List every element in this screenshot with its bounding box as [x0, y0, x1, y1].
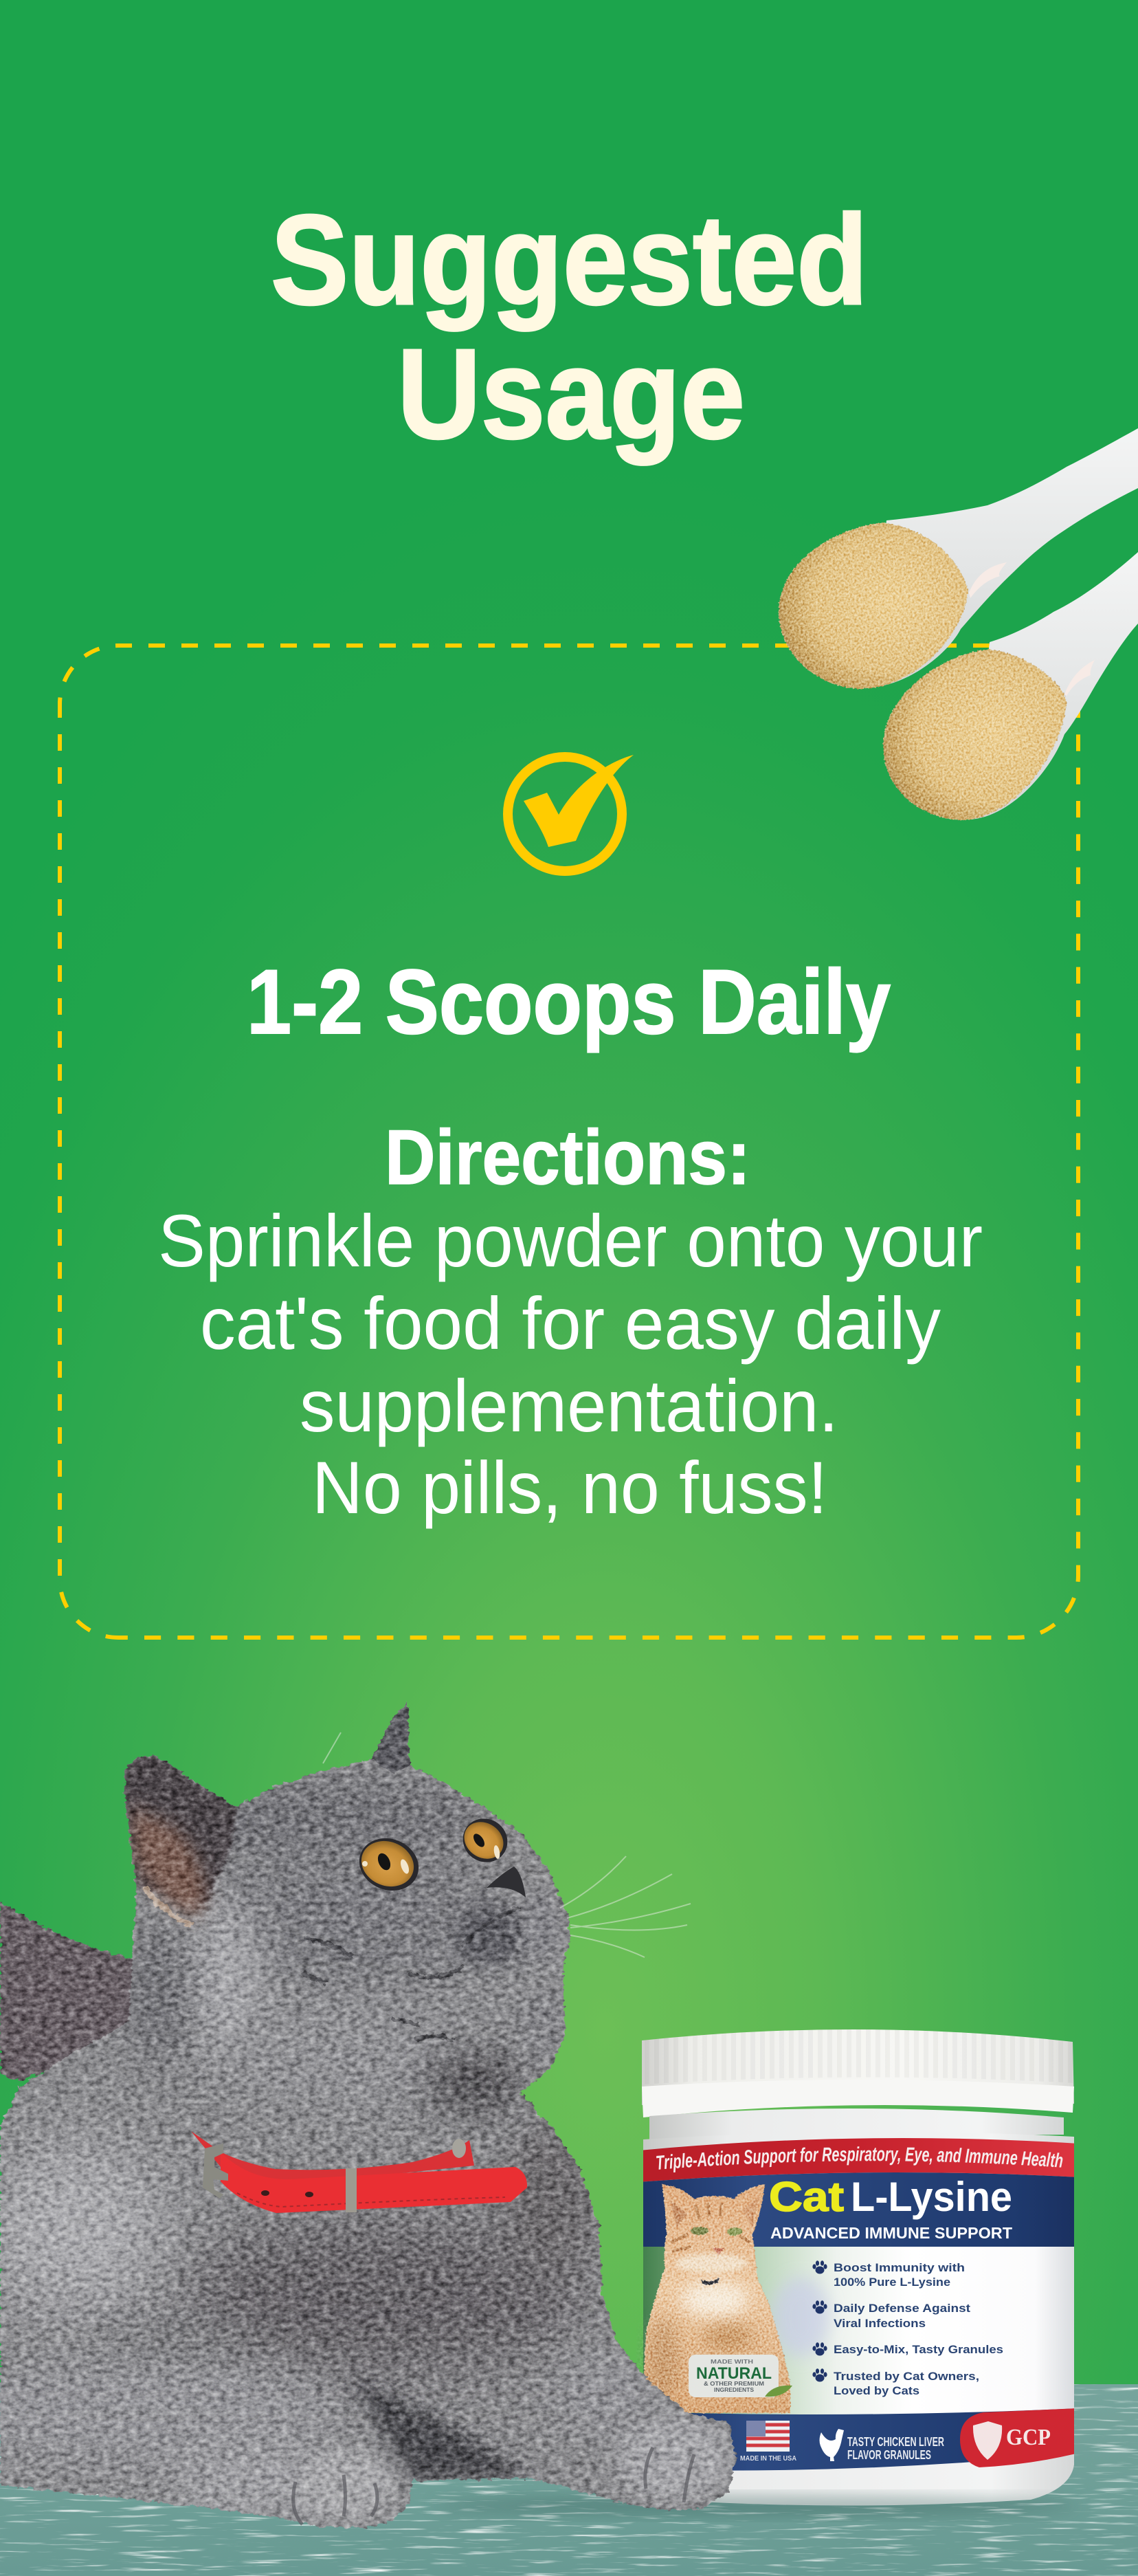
toe lines on paws: [293, 2447, 694, 2524]
lower red badge: [960, 2408, 1079, 2467]
icon: chicken: [819, 2429, 844, 2461]
flavor text: [847, 2435, 944, 2462]
natural badge: [689, 2355, 792, 2397]
icon: gcp shield: [973, 2421, 1002, 2460]
natural badge: NATURAL: [696, 2364, 772, 2383]
cat nose: [487, 1867, 526, 1897]
orange cat on label: [644, 2184, 790, 2413]
product name: L-Lysine: [851, 2174, 1012, 2220]
jar neck: [649, 2109, 1064, 2139]
flavor text: FLAVOR GRANULES: [847, 2448, 931, 2462]
lower blue band: [684, 2408, 1074, 2471]
directions text block: supplementation.: [300, 1364, 838, 1447]
label benefit list: Trusted by Cat Owners,: [834, 2370, 979, 2383]
tagline on banner: Triple-Action Support for Respiratory, Eye, and Immune Health: [656, 2146, 1062, 2172]
label photo background: [639, 2247, 1079, 2414]
natural badge: & OTHER PREMIUM: [704, 2381, 764, 2387]
cat tail: [0, 1901, 144, 2081]
blue header band: [639, 2172, 1079, 2249]
directions text block: Sprinkle powder onto your: [158, 1199, 983, 1282]
brand name: GCP: [1006, 2425, 1051, 2450]
dashed panel border: [60, 646, 1078, 1638]
label benefit list: [812, 2260, 1003, 2397]
icon: usa flag: [746, 2421, 790, 2452]
made in usa label: MADE IN THE USA: [740, 2455, 796, 2463]
contact shadow under cat and jar: [433, 2498, 1079, 2514]
title: Suggested: [271, 189, 868, 331]
face creases: [302, 1908, 519, 2040]
right ear: [370, 1702, 410, 1774]
right eye: [454, 1810, 516, 1871]
product subtitle: ADVANCED IMMUNE SUPPORT: [770, 2224, 1012, 2242]
left eye: [351, 1829, 427, 1900]
title: Usage: [397, 323, 745, 465]
grey cat: [0, 1691, 756, 2544]
product name: Cat: [769, 2174, 844, 2220]
label benefit list: Daily Defense Against: [834, 2302, 971, 2315]
label benefit list: Easy-to-Mix, Tasty Granules: [834, 2344, 1003, 2356]
natural badge: MADE WITH: [711, 2359, 753, 2365]
red collar: [191, 2131, 527, 2213]
jar body: [639, 2124, 1079, 2509]
directions text block: No pills, no fuss!: [312, 1446, 827, 1529]
icon: yellow check mark in circle: [508, 755, 634, 871]
label benefit list: Boost Immunity with: [834, 2262, 965, 2274]
title: [271, 189, 868, 465]
cat fur body: [0, 1691, 756, 2544]
whiskers: [323, 1732, 691, 1957]
dosage heading: 1-2 Scoops Daily: [247, 951, 891, 1053]
directions text block: [158, 1114, 983, 1529]
jar lid: [642, 2029, 1074, 2117]
directions text block: Directions:: [385, 1114, 750, 1200]
product jar: [638, 2029, 1074, 2505]
product name: [769, 2174, 1012, 2220]
directions text block: cat's food for easy daily: [200, 1281, 941, 1365]
cat body and head: [0, 1691, 756, 2544]
icon: spoon one with powder: [779, 428, 1138, 689]
fur shading: [0, 1781, 732, 2521]
label benefit list: Loved by Cats: [834, 2385, 919, 2397]
natural badge: INGREDIENTS: [714, 2387, 755, 2393]
red banner: [639, 2138, 1079, 2182]
label benefit list: Viral Infections: [834, 2318, 926, 2330]
left ear: [124, 1757, 237, 1925]
table surface: [0, 2384, 1138, 2576]
label benefit list: 100% Pure L-Lysine: [834, 2276, 950, 2289]
lavender blur: [772, 2277, 829, 2357]
icon: spoon two with powder: [883, 552, 1138, 820]
flavor text: TASTY CHICKEN LIVER: [847, 2435, 944, 2449]
